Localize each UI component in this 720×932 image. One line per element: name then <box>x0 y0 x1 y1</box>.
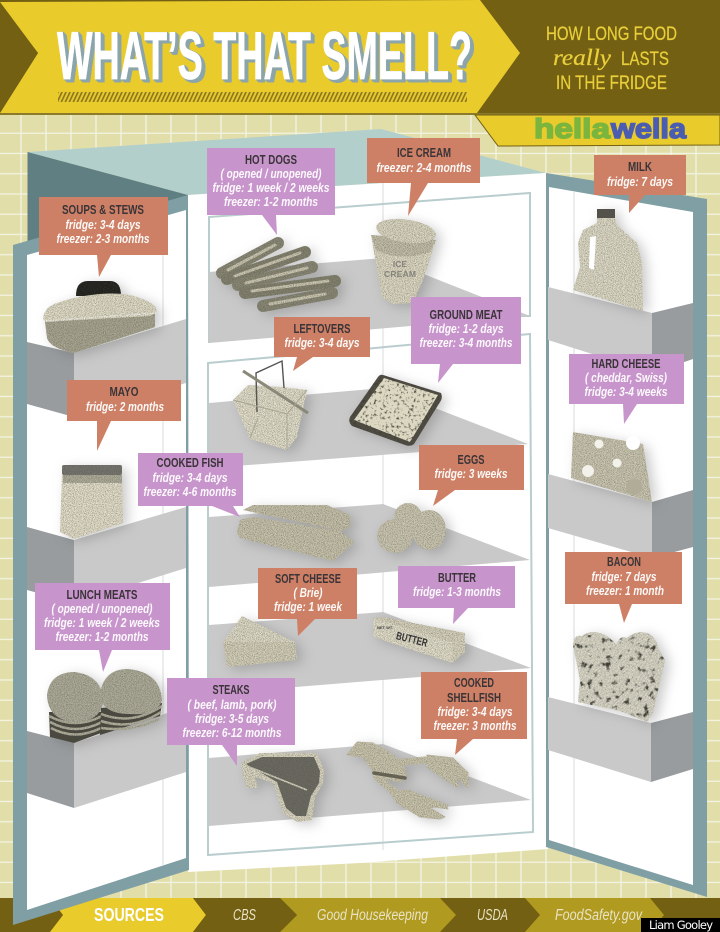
label: hard cheese: HARD CHEESE <box>592 357 660 371</box>
food: lunch meats <box>47 669 162 743</box>
label: cooked shellfish <box>421 672 527 755</box>
label: milk: MILK <box>628 160 652 174</box>
label: hard cheese: ( cheddar, Swiss) <box>585 371 667 385</box>
label: bacon: fridge: 7 days <box>592 570 657 584</box>
shelf 2 <box>209 388 528 468</box>
logo strip <box>475 113 720 146</box>
footer sources bar: FoodSafety.gov <box>555 907 643 924</box>
food: hot dogs <box>222 243 335 306</box>
door bin 2 <box>548 474 693 558</box>
label: ground meat <box>411 297 521 383</box>
label: cooked shellfish: SHELLFISH <box>447 691 501 705</box>
food: bacon <box>573 632 665 722</box>
subtitle: really <box>553 45 612 70</box>
food: eggs <box>377 503 446 553</box>
label: soups and stews: SOUPS & STEWS <box>62 203 144 217</box>
label: hot dogs: fridge: 1 week / 2 weeks <box>212 181 330 195</box>
header banner <box>0 0 720 146</box>
label: milk <box>594 155 686 213</box>
label: butter: BUTTER <box>438 571 476 585</box>
label: bacon: BACON <box>607 555 641 569</box>
label: ground meat: GROUND MEAT <box>430 308 503 322</box>
shelf 3 <box>209 504 530 587</box>
left door <box>13 195 189 925</box>
label: steaks: fridge: 3-5 days <box>195 712 269 726</box>
label: soft cheese: fridge: 1 week <box>274 600 343 614</box>
label: leftovers: fridge: 3-4 days <box>284 336 360 350</box>
right door <box>546 173 707 897</box>
label: ice cream: ICE CREAM <box>397 146 451 160</box>
food: milk jug <box>573 209 643 311</box>
footer sources bar: Good Housekeeping <box>317 907 428 924</box>
food: butter: NET WT. <box>377 625 393 630</box>
label: lunch meats: LUNCH MEATS <box>66 588 138 602</box>
label: soups and stews <box>39 197 168 277</box>
food: ice cream tub <box>371 215 437 304</box>
label: hard cheese: fridge: 3-4 weeks <box>584 385 668 399</box>
label: lunch meats: fridge: 1 week / 2 weeks <box>44 616 160 630</box>
footer sources bar: SOURCES <box>94 905 164 925</box>
door bin 1 <box>27 319 186 417</box>
food: steak <box>241 753 324 822</box>
food: fish fillets <box>237 505 355 561</box>
shelf 1 <box>209 258 530 343</box>
label: mayo: MAYO <box>110 385 139 399</box>
subtitle: IN THE FRIDGE <box>556 73 667 94</box>
label: steaks: ( beef, lamb, pork) <box>188 698 276 712</box>
label: mayo <box>67 380 181 451</box>
shelf 5 <box>209 744 531 826</box>
shelf 4 <box>209 612 531 694</box>
label: butter <box>398 566 515 624</box>
label: leftovers <box>274 317 370 371</box>
fridge inner left wall <box>28 152 188 245</box>
label: ground meat: fridge: 1-2 days <box>428 322 504 336</box>
label: cooked fish <box>138 453 243 517</box>
fridge top <box>28 129 546 195</box>
label: cooked shellfish: COOKED <box>454 676 494 690</box>
food: lobster <box>347 742 468 819</box>
upper compartment frame <box>209 193 530 343</box>
label: mayo: fridge: 2 months <box>86 400 164 414</box>
label: butter: fridge: 1-3 months <box>413 585 501 599</box>
food: ground meat tray <box>349 375 442 446</box>
subtitle: LASTS <box>621 49 669 70</box>
label: lunch meats: freezer: 1-2 months <box>56 630 149 644</box>
label: hot dogs: freezer: 1-2 months <box>224 195 318 209</box>
label: soups and stews: freezer: 2-3 months <box>56 232 150 246</box>
label: soups and stews: fridge: 3-4 days <box>66 218 141 232</box>
label: cooked fish: freezer: 4-6 months <box>144 485 237 499</box>
label: cooked fish: COOKED FISH <box>156 456 224 470</box>
label: cooked shellfish: freezer: 3 months <box>434 719 517 733</box>
footer sources bar <box>0 898 720 932</box>
label: soft cheese: ( Brie) <box>294 586 322 600</box>
hatched underline <box>58 92 467 102</box>
food: hard cheese <box>571 432 652 502</box>
label: steaks: STEAKS <box>212 683 250 697</box>
door bin 3 <box>548 697 693 782</box>
food: soft cheese <box>223 616 297 667</box>
label: hot dogs <box>207 148 335 235</box>
label: bacon: freezer: 1 month <box>586 584 664 598</box>
footer sources bar: USDA <box>477 907 508 924</box>
fridge body <box>188 173 548 872</box>
label: cooked shellfish: fridge: 3-4 days <box>438 705 513 719</box>
food: ice cream tub: CREAM <box>384 269 416 279</box>
label: hot dogs: ( opened / unopened) <box>220 167 322 181</box>
label: eggs <box>419 445 524 506</box>
food: mayo jar <box>60 465 123 539</box>
label: leftovers: LEFTOVERS <box>294 322 350 336</box>
subtitle: HOW LONG FOOD <box>546 24 677 45</box>
door bin 3 <box>27 707 186 808</box>
footer sources bar: CBS <box>233 907 256 924</box>
label: steaks: freezer: 6-12 months <box>182 726 282 740</box>
label: steaks <box>167 678 295 766</box>
label: eggs: EGGS <box>458 453 484 467</box>
door bin 2 <box>27 507 186 603</box>
label: lunch meats: ( opened / unopened) <box>52 602 152 616</box>
label: ice cream: freezer: 2-4 months <box>376 161 472 175</box>
photo credit: Liam Gooley <box>649 918 713 932</box>
label: bacon <box>565 552 682 623</box>
label: soft cheese: SOFT CHEESE <box>275 572 341 586</box>
label: milk: fridge: 7 days <box>607 175 673 189</box>
food: butter <box>373 617 465 663</box>
label: hard cheese <box>569 354 684 424</box>
label: cooked fish: fridge: 3-4 days <box>152 471 228 485</box>
logo strip: hella <box>534 113 611 144</box>
label: lunch meats <box>35 583 170 672</box>
subtitle <box>546 24 677 94</box>
label: ground meat: freezer: 3-4 months <box>420 336 513 350</box>
label: eggs: fridge: 3 weeks <box>434 467 508 481</box>
food: soup pot <box>43 281 157 353</box>
food: butter: BUTTER <box>395 630 429 650</box>
label: hot dogs: HOT DOGS <box>245 153 297 167</box>
logo strip: wella <box>610 113 686 144</box>
lower compartment frame <box>208 334 533 855</box>
label: ice cream <box>367 138 480 216</box>
door bin 1 <box>548 287 693 373</box>
food: takeout box <box>233 361 308 450</box>
food: ice cream tub: ICE <box>393 259 407 269</box>
label: soft cheese <box>258 568 357 636</box>
